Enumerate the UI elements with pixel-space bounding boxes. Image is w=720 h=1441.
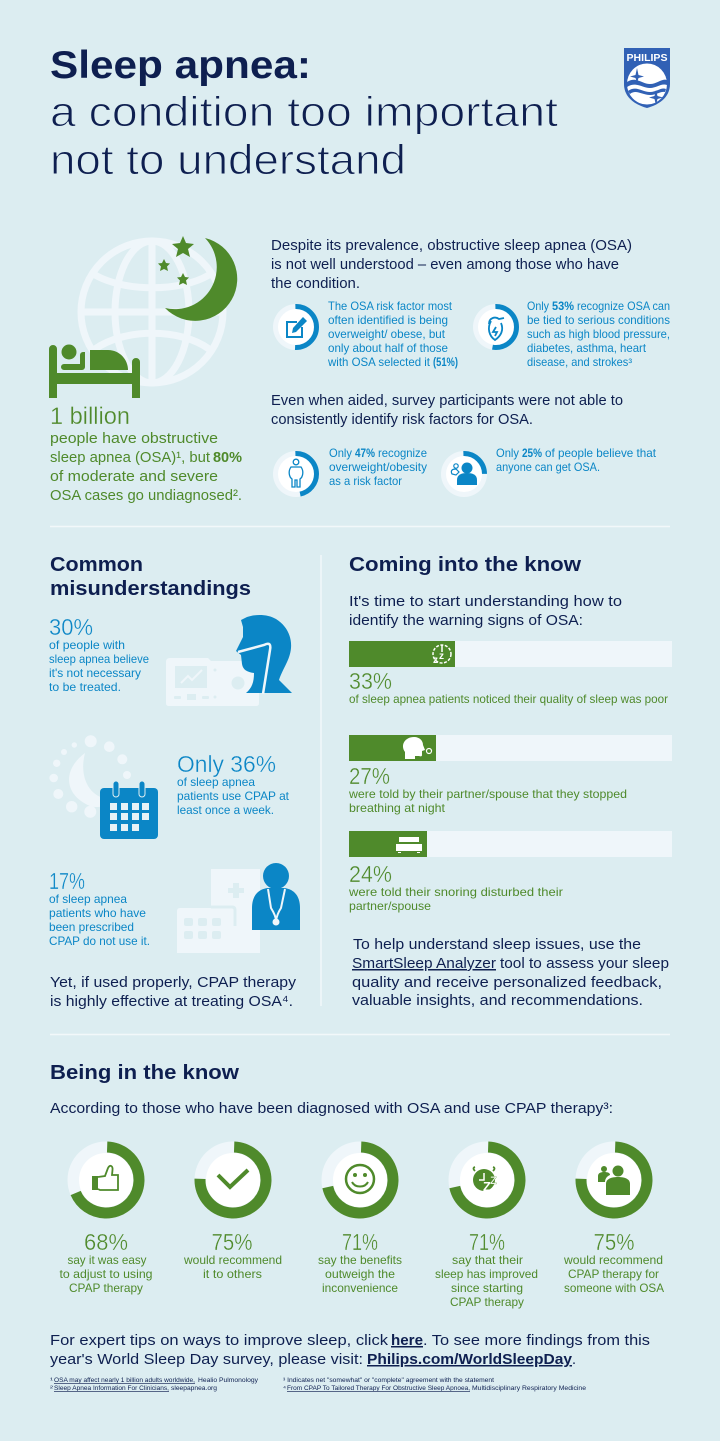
heading: common misunderstandings: Common bbox=[50, 553, 143, 576]
illustration: CPAP machine bbox=[166, 658, 259, 706]
stat: 53% serious conditions: 53% bbox=[552, 300, 574, 313]
icon: doctor bbox=[252, 863, 300, 930]
stat: 51% risk factor: The OSA risk factor most bbox=[328, 300, 453, 313]
donut: 75% recommend for someone with OSA: someone with OSA bbox=[564, 1282, 664, 1295]
donut: 71% sleep improved bbox=[435, 1142, 538, 1309]
text: CPAP users intro: According to those who have been diagnosed with OSA and use CPAP therapy³: bbox=[50, 1100, 613, 1117]
stat: 47% overweight: 47% bbox=[355, 447, 375, 460]
donut: 68% easy to adjust: to adjust to using bbox=[60, 1268, 152, 1281]
donut: 75% recommend: it to others bbox=[203, 1268, 262, 1281]
donut: 75% recommend for someone with OSA: would recommend bbox=[563, 1254, 663, 1267]
bar: 24% snoring bbox=[348, 831, 672, 913]
stat: 53% serious conditions: diabetes, asthma, heart bbox=[527, 342, 647, 355]
illustration: hospital bbox=[177, 869, 260, 953]
text: 1 billion stat: sleep apnea (OSA)¹, but bbox=[50, 449, 211, 466]
stat: 47% overweight: Only bbox=[329, 447, 352, 460]
icon: calendar bbox=[100, 781, 158, 839]
logo: Philips shield: PHILIPS bbox=[626, 53, 668, 64]
text: footnotes: OSA may affect nearly 1 billion adults worldwide, bbox=[54, 1377, 195, 1384]
stat: 17%: been prescribed bbox=[49, 921, 134, 934]
bar: 33% poor sleep: of sleep apnea patients noticed their quality of sleep was poor bbox=[349, 693, 668, 706]
stat: 51% risk factor: often identified is being bbox=[328, 314, 448, 327]
logo: Philips shield bbox=[624, 48, 670, 108]
text: footnotes: ³ Indicates net "somewhat" or "complete" agreement with the statement bbox=[283, 1377, 494, 1384]
stat: 51% risk factor: overweight/ obese, but bbox=[328, 328, 446, 341]
bar: 24% snoring: were told their snoring disturbed their bbox=[348, 886, 563, 899]
stat: only 36%: patients use CPAP at bbox=[177, 790, 290, 803]
stat: 51% risk factor: (51%) bbox=[433, 356, 458, 369]
stat: 25% anyone: of people believe that bbox=[545, 447, 657, 460]
donut: 71% benefits: inconvenience bbox=[322, 1282, 398, 1295]
stat: 25% anyone: anyone can get OSA. bbox=[496, 461, 600, 474]
text: footnotes: ⁴ bbox=[283, 1385, 286, 1392]
text: closing call to action bbox=[50, 1332, 650, 1368]
donut: 71% sleep improved: CPAP therapy bbox=[450, 1296, 524, 1309]
text: SmartSleep Analyzer paragraph: To help understand sleep issues, use the bbox=[353, 936, 641, 953]
text: SmartSleep Analyzer paragraph bbox=[352, 936, 669, 1009]
stat: 53% serious conditions bbox=[473, 300, 670, 369]
stat: 53% serious conditions: such as high blood pressure, bbox=[527, 328, 670, 341]
donut: 71% sleep improved: since starting bbox=[451, 1282, 523, 1295]
bar: 27% stopped breathing: 27% bbox=[349, 763, 390, 789]
text: 1 billion stat: people have obstructive bbox=[50, 430, 218, 447]
stat: 30%: of people with bbox=[49, 639, 125, 652]
stat: 47% overweight: recognize bbox=[378, 447, 427, 460]
donut: 68% easy to adjust: CPAP therapy bbox=[69, 1282, 143, 1295]
text: footnotes: Healio Pulmonology bbox=[198, 1377, 259, 1384]
text: warning signs intro: It's time to start understanding how to bbox=[349, 593, 622, 610]
stat: 17%: CPAP do not use it. bbox=[49, 935, 150, 948]
bar: 33% poor sleep: z bbox=[433, 655, 438, 666]
stat: 17%: patients who have bbox=[49, 907, 146, 920]
stat: 25% anyone: Only bbox=[496, 447, 519, 460]
donut: 68% easy to adjust: 68% bbox=[84, 1229, 128, 1255]
donut: 68% easy to adjust: say it was easy bbox=[68, 1254, 147, 1267]
stat: 53% serious conditions: disease, and strokes³ bbox=[527, 356, 632, 369]
text: 1 billion stat: of moderate and severe bbox=[50, 468, 218, 485]
text: warning signs intro: identify the warning signs of OSA: bbox=[349, 612, 583, 629]
stat: 47% overweight: as a risk factor bbox=[329, 475, 402, 488]
stat: only 36%: Only 36% bbox=[177, 751, 276, 777]
donut: 71% benefits: 71% bbox=[342, 1229, 378, 1255]
icon: person in bed bbox=[49, 344, 140, 398]
donut: 71% benefits bbox=[318, 1142, 402, 1295]
text: warning signs intro bbox=[349, 593, 622, 629]
stat: 53% serious conditions: Only bbox=[527, 300, 549, 313]
stat: 51% risk factor: only about half of those bbox=[328, 342, 448, 355]
donut: 75% recommend bbox=[183, 1142, 282, 1281]
donut: 71% sleep improved: say that their bbox=[452, 1254, 523, 1267]
illustration: globe, moon, stars bbox=[81, 236, 237, 383]
text: SmartSleep Analyzer paragraph: quality and receive personalized feedback, bbox=[352, 974, 662, 991]
illustration: crescent and dots bbox=[49, 735, 131, 818]
title: not to understand bbox=[50, 136, 406, 183]
donut: 75% recommend: 75% bbox=[212, 1229, 252, 1255]
text: aided paragraph bbox=[271, 392, 623, 428]
text: footnotes: ¹ bbox=[50, 1377, 54, 1384]
donut: 71% sleep improved: Z bbox=[483, 1179, 491, 1194]
text: SmartSleep Analyzer paragraph: valuable insights, and recommendations. bbox=[352, 992, 643, 1009]
bar: 27% stopped breathing: breathing at night bbox=[349, 802, 446, 815]
text: intro paragraph: is not well understood – even among those who have bbox=[271, 256, 619, 273]
stat: 30%: sleep apnea believe bbox=[49, 653, 149, 666]
text: 1 billion stat: OSA cases go undiagnosed². bbox=[50, 487, 242, 504]
stat: 30% bbox=[49, 614, 149, 694]
donut: 71% sleep improved: Z bbox=[490, 1175, 497, 1187]
stat: 30%: to be treated. bbox=[49, 681, 121, 694]
text: intro paragraph bbox=[271, 237, 632, 292]
text: intro paragraph: the condition. bbox=[271, 275, 360, 292]
bar: 33% poor sleep: 33% bbox=[349, 668, 392, 694]
text: 1 billion stat bbox=[50, 403, 242, 504]
stat: 51% risk factor: with OSA selected it bbox=[327, 356, 431, 369]
text: SmartSleep Analyzer paragraph: SmartSleep Analyzer bbox=[352, 955, 496, 972]
text: footnotes: Multidisciplinary Respiratory Medicine bbox=[472, 1385, 586, 1392]
donut: 71% sleep improved: 71% bbox=[469, 1229, 505, 1255]
text: CPAP effectiveness bbox=[50, 974, 297, 1010]
text: CPAP effectiveness: Yet, if used properly, CPAP therapy bbox=[50, 974, 297, 991]
stat: 53% serious conditions: recognize OSA can bbox=[577, 300, 670, 313]
text: closing call to action: For expert tips on ways to improve sleep, click bbox=[50, 1332, 389, 1349]
stat: 30%: 30% bbox=[49, 614, 93, 640]
heading: common misunderstandings bbox=[50, 553, 251, 600]
bar: 33% poor sleep bbox=[349, 641, 672, 706]
stat: only 36%: least once a week. bbox=[177, 804, 274, 817]
stat: 53% serious conditions: be tied to serious conditions bbox=[527, 314, 670, 327]
stat: 30%: it's not necessary bbox=[49, 667, 141, 680]
heading: common misunderstandings: misunderstandings bbox=[50, 577, 251, 600]
donut: 75% recommend for someone with OSA: 75% bbox=[594, 1229, 634, 1255]
text: footnotes: sleepapnea.org bbox=[171, 1385, 217, 1392]
donut: 75% recommend for someone with OSA bbox=[563, 1142, 664, 1295]
heading: coming into the know: Coming into the know bbox=[349, 553, 581, 576]
stat: 47% overweight: overweight/obesity bbox=[329, 461, 427, 474]
donut: 68% easy to adjust bbox=[60, 1142, 152, 1295]
stat: 17%: of sleep apnea bbox=[49, 893, 128, 906]
title: Sleep apnea: bbox=[50, 44, 311, 87]
text: closing call to action: Philips.com/WorldSleepDay bbox=[367, 1351, 573, 1368]
heading: being in the know: Being in the know bbox=[50, 1061, 239, 1084]
text: footnotes bbox=[50, 1377, 586, 1392]
text: footnotes: From CPAP To Tailored Therapy For Obstructive Sleep Apnoea, bbox=[287, 1385, 470, 1392]
text: 1 billion stat: 80% bbox=[213, 449, 242, 466]
bar: 24% snoring: 24% bbox=[349, 861, 392, 887]
text: aided paragraph: consistently identify risk factors for OSA. bbox=[271, 411, 533, 428]
text: closing call to action: . bbox=[572, 1351, 576, 1368]
donut: 75% recommend: would recommend bbox=[183, 1254, 282, 1267]
stat: only 36% bbox=[177, 751, 290, 817]
text: closing call to action: here bbox=[391, 1332, 423, 1349]
title bbox=[50, 44, 558, 183]
bar: 27% stopped breathing bbox=[348, 735, 672, 815]
stat: 47% overweight bbox=[273, 447, 427, 497]
stat: 17%: 17% bbox=[49, 868, 85, 894]
text: intro paragraph: Despite its prevalence, obstructive sleep apnea (OSA) bbox=[271, 237, 632, 254]
donut: 71% benefits: outweigh the bbox=[325, 1268, 395, 1281]
text: footnotes: ² bbox=[50, 1385, 54, 1392]
bar: 33% poor sleep: z bbox=[439, 651, 444, 662]
text: closing call to action: . To see more findings from this bbox=[423, 1332, 650, 1349]
text: footnotes: Sleep Apnea Information For Clinicians, bbox=[54, 1385, 169, 1392]
bar: 24% snoring: partner/spouse bbox=[349, 900, 431, 913]
stat: only 36%: of sleep apnea bbox=[177, 776, 256, 789]
donut: 71% benefits: say the benefits bbox=[318, 1254, 402, 1267]
donut: 71% sleep improved: sleep has improved bbox=[435, 1268, 538, 1281]
stat: 17% bbox=[49, 868, 150, 948]
donut: 75% recommend for someone with OSA: CPAP therapy for bbox=[568, 1268, 659, 1281]
text: CPAP effectiveness: is highly effective at treating OSA⁴. bbox=[50, 993, 293, 1010]
text: aided paragraph: Even when aided, survey participants were not able to bbox=[271, 392, 623, 409]
title: a condition too important bbox=[50, 88, 558, 135]
stat: 51% risk factor bbox=[273, 300, 458, 369]
text: closing call to action: year's World Sleep Day survey, please visit: bbox=[50, 1351, 363, 1368]
text: 1 billion stat: 1 billion bbox=[50, 403, 130, 430]
bar: 27% stopped breathing: were told by their partner/spouse that they stopped bbox=[348, 788, 627, 801]
icon: head with CPAP tube bbox=[236, 615, 292, 694]
stat: 25% anyone: 25% bbox=[522, 447, 542, 460]
stat: 25% anyone bbox=[441, 447, 657, 497]
text: SmartSleep Analyzer paragraph: tool to assess your sleep bbox=[500, 955, 669, 972]
